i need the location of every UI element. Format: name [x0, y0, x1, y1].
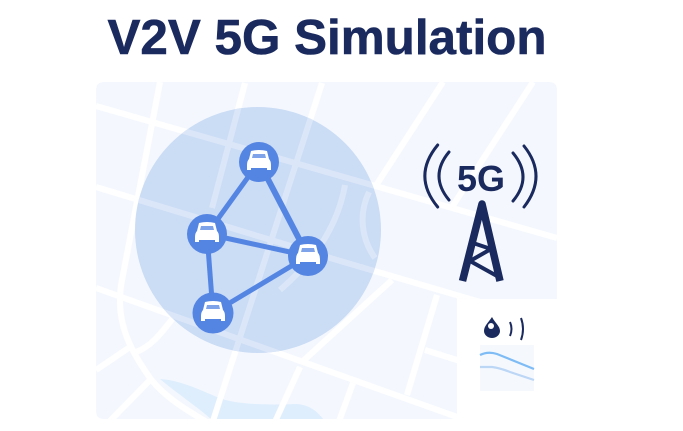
5G label: 5G [457, 158, 505, 199]
infographic canvas [96, 18, 557, 419]
signal waves [425, 145, 536, 207]
mini line chart [480, 345, 534, 391]
tower structure [462, 204, 500, 281]
coverage circle [135, 107, 381, 353]
vehicle node 4 [192, 292, 234, 334]
vehicle node 2 [187, 214, 227, 254]
network links between vehicles [207, 162, 308, 313]
vehicle node 1 [239, 142, 279, 182]
panel: city map background [96, 82, 557, 424]
title: V2V 5G Simulation [108, 11, 546, 65]
icon: water drop with ripple marks [484, 317, 523, 340]
map roads [96, 82, 557, 424]
vehicle node 3 [288, 236, 328, 276]
lake [160, 379, 324, 420]
icon: 5G tower [425, 145, 536, 281]
